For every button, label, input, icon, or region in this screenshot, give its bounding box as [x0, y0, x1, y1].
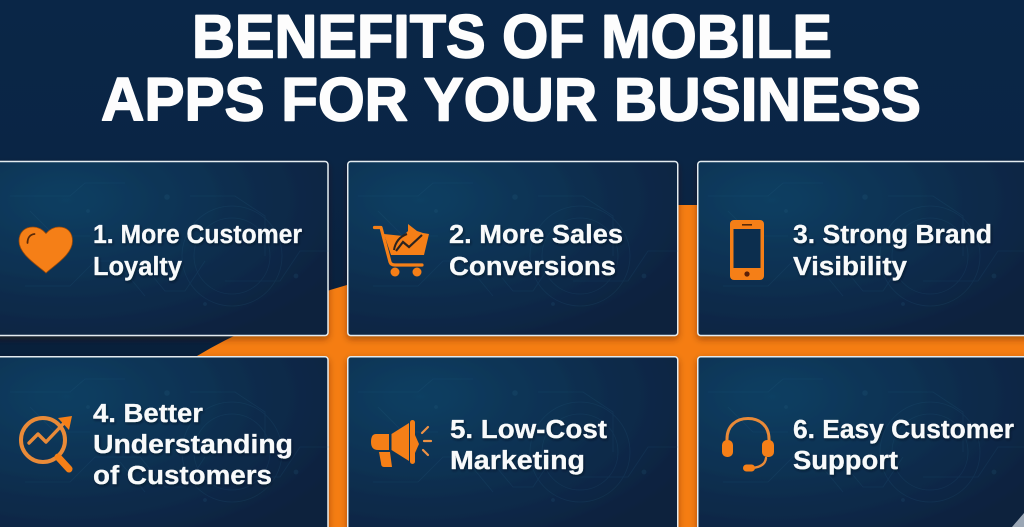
panel: 5 Low-Cost Marketing	[348, 357, 678, 527]
title	[101, 2, 921, 134]
text: 1. More Customer Loyalty	[93, 221, 302, 281]
icon: magnifier with growth arrow	[21, 416, 72, 469]
text: 4. Better Understanding of Customers: of Customers	[93, 462, 272, 490]
panel: 6 Easy Customer Support	[698, 357, 1024, 527]
text: 1. More Customer Loyalty: Loyalty	[93, 253, 183, 281]
text: 2. More Sales Conversions	[449, 221, 623, 281]
title: APPS FOR YOUR BUSINESS	[101, 66, 921, 134]
panel: 2 More Sales Conversions	[348, 162, 678, 336]
text: 5. Low-Cost Marketing: Marketing	[450, 447, 585, 475]
corner fold	[1012, 513, 1024, 527]
title: BENEFITS OF MOBILE	[192, 2, 832, 70]
text: 6. Easy Customer Support	[793, 416, 1014, 475]
text: 4. Better Understanding of Customers: Understanding	[93, 431, 293, 459]
icon: headset	[722, 418, 774, 472]
icon: megaphone	[371, 420, 431, 467]
text: 6. Easy Customer Support: 6. Easy Customer	[793, 416, 1014, 444]
text: 1. More Customer Loyalty: 1. More Customer	[93, 221, 302, 249]
text: 2. More Sales Conversions: Conversions	[449, 253, 616, 281]
text: 4. Better Understanding of Customers: 4. Better	[93, 400, 203, 428]
text: 3. Strong Brand Visibility	[793, 221, 992, 281]
text: 3. Strong Brand Visibility: 3. Strong Brand	[793, 221, 992, 249]
panel: 4 Better Understanding of Customers	[0, 357, 330, 527]
panel: 1 More Customer Loyalty	[0, 162, 330, 336]
icon: smartphone	[730, 220, 764, 280]
icon: shopping cart with arrow	[374, 224, 429, 276]
text: 6. Easy Customer Support: Support	[793, 447, 899, 475]
text: 5. Low-Cost Marketing	[450, 416, 608, 475]
text: 4. Better Understanding of Customers	[93, 400, 293, 490]
text: 2. More Sales Conversions: 2. More Sales	[449, 221, 623, 249]
panel: 3 Strong Brand Visibility	[698, 162, 1024, 336]
text: 5. Low-Cost Marketing: 5. Low-Cost	[450, 416, 608, 444]
orange cross shape behind the cards	[197, 205, 1024, 527]
icon: heart	[19, 227, 72, 273]
text: 3. Strong Brand Visibility: Visibility	[793, 253, 908, 281]
